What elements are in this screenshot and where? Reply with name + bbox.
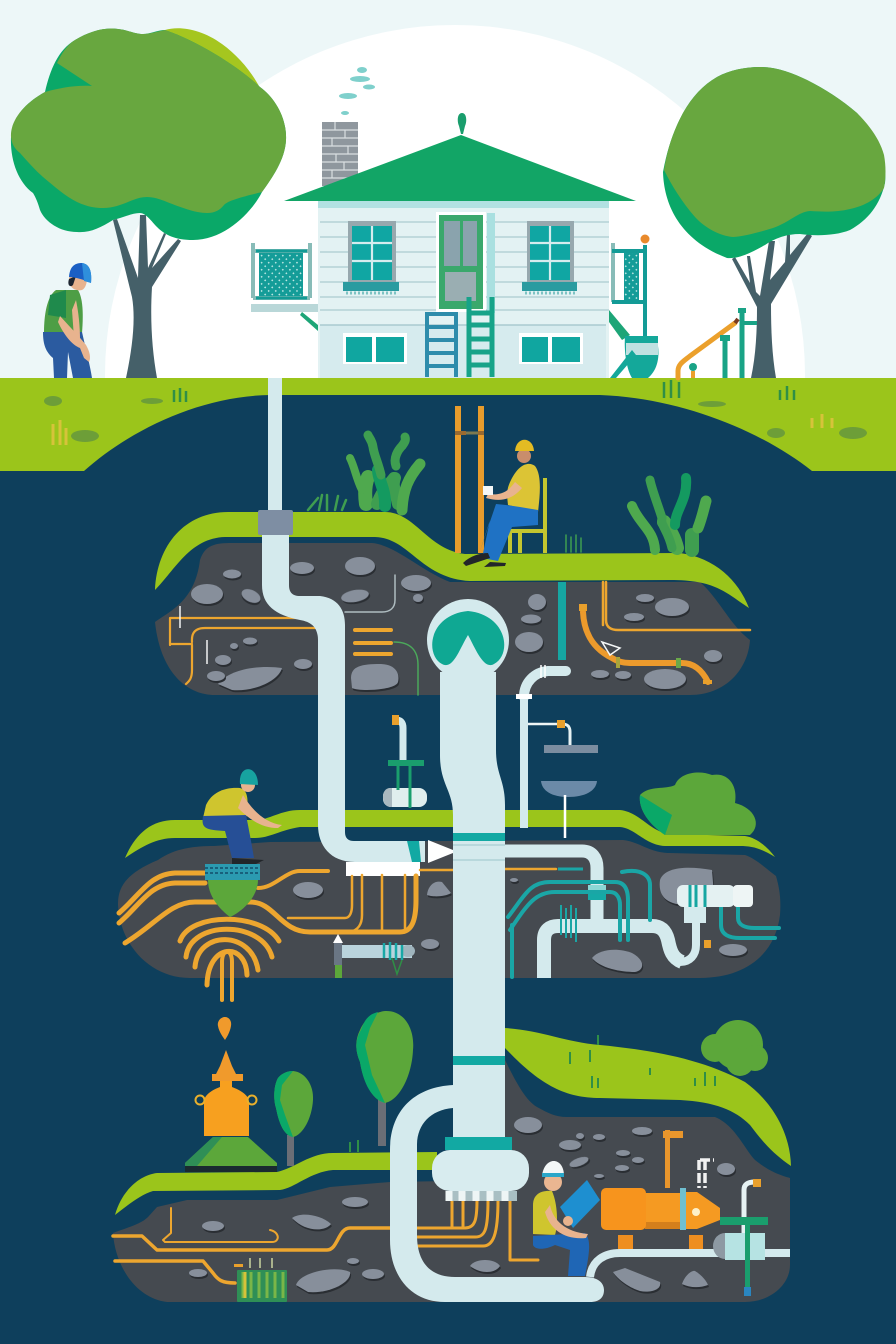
- lower valve layer 2: [333, 934, 415, 978]
- crouching worker with blueprint: [533, 1161, 600, 1276]
- blue ladder: [427, 312, 456, 377]
- grass tufts lower: [350, 1035, 715, 1152]
- green bush layer 2: [640, 772, 756, 835]
- green valve layer 3: [713, 1179, 768, 1296]
- grass band 3 right: [505, 1028, 791, 1166]
- orange hydrant: [185, 1017, 277, 1172]
- teal pipes layer 2: [508, 869, 779, 977]
- teal vertical pipe: [558, 582, 566, 660]
- large bottom pipe: [390, 1085, 604, 1302]
- roof: [284, 135, 636, 201]
- lower trees: [274, 1011, 413, 1166]
- rocks layer 1: [191, 557, 722, 690]
- grass band 1: [155, 512, 749, 608]
- bush on grass: [701, 1020, 768, 1076]
- grass band 2: [125, 810, 775, 858]
- orange lines layer 2: [119, 869, 556, 943]
- navy inner gap behind tank: [417, 1108, 505, 1180]
- seated worker with chair: [463, 440, 545, 567]
- soil layer 3: [113, 1060, 790, 1302]
- garden pipe and valves: [678, 308, 757, 378]
- kneeling worker: [203, 769, 282, 864]
- orange lines layer 3: [113, 1200, 538, 1283]
- right valve assembly layer 2: [677, 885, 753, 962]
- seaweed plant right: [566, 478, 706, 552]
- orange standpipes: [455, 406, 484, 553]
- soil layer 1: [155, 543, 750, 695]
- right balcony and planter: [609, 234, 658, 378]
- left window: [343, 221, 399, 293]
- basement windows: [343, 333, 583, 364]
- worker at surface: [43, 263, 92, 378]
- branch pipe layer 2: [505, 851, 682, 978]
- main vertical pipe: [427, 599, 509, 1137]
- root fan: [180, 864, 279, 1000]
- left tree: [11, 28, 286, 378]
- sink drain pipe and shower: [516, 665, 598, 838]
- green ladder: [469, 297, 492, 377]
- pump: [601, 1130, 720, 1249]
- sky background: [0, 0, 896, 725]
- orange lines layer 1: [170, 575, 750, 695]
- right window: [522, 221, 577, 293]
- left branching pipe: [258, 378, 453, 876]
- door: [436, 212, 486, 312]
- right tree: [663, 67, 886, 378]
- lower right thin pipe: [590, 1253, 790, 1277]
- rocks layer 2: [293, 868, 747, 972]
- chimney and smoke: [322, 67, 375, 186]
- left balcony: [251, 243, 319, 331]
- roof finial: [458, 113, 466, 134]
- shower valve above layer 2: [383, 715, 427, 808]
- orange elbow pipe layer 1: [579, 604, 712, 684]
- grass band 3 left: [115, 1152, 437, 1215]
- ground surface and underground dome: [0, 378, 896, 1344]
- house: [284, 113, 636, 378]
- seaweed plant left: [308, 435, 420, 510]
- tank with flange: [432, 1137, 529, 1201]
- grass tufts: [44, 380, 867, 445]
- soil layer 2: [118, 840, 780, 978]
- rocks layer 3: [189, 1117, 735, 1292]
- radiator: [234, 1258, 287, 1302]
